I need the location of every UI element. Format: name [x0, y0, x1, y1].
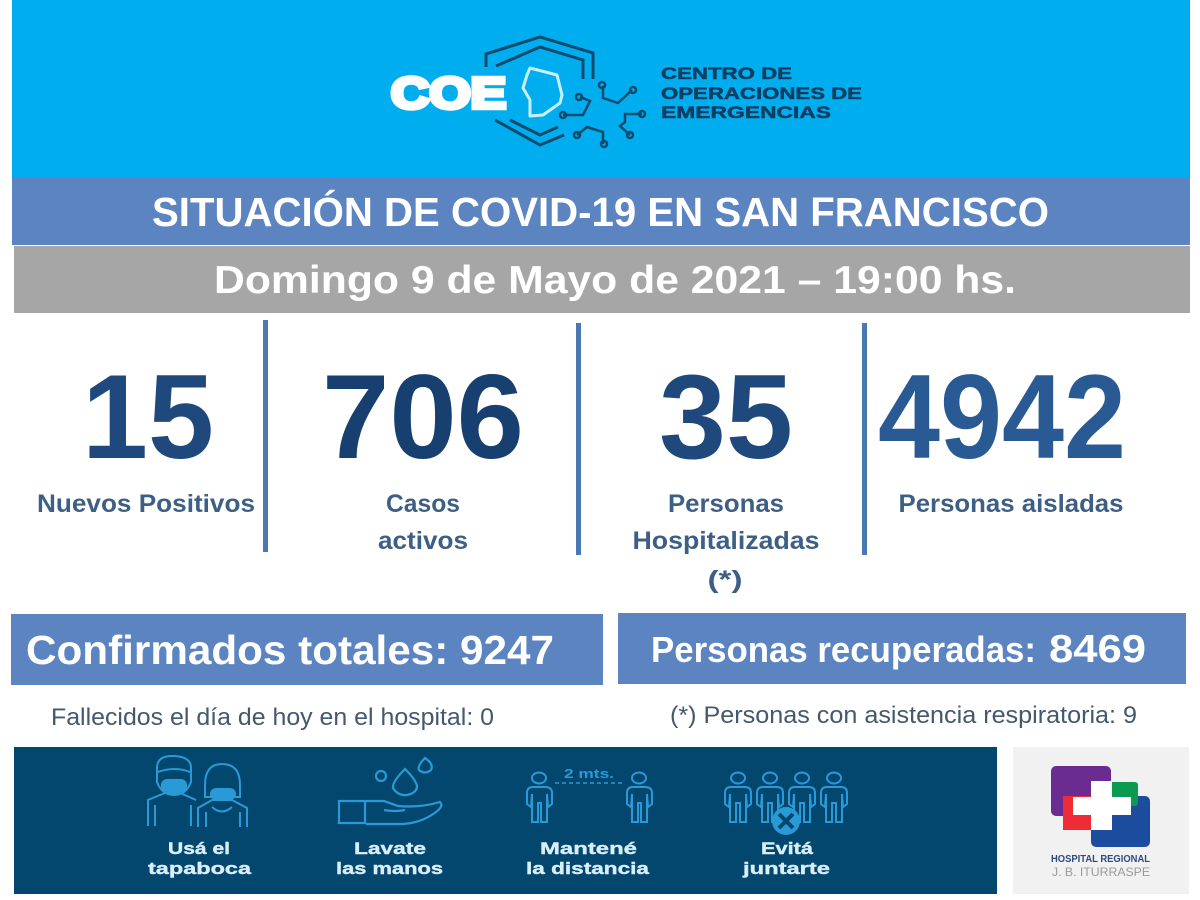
- panel: total confirmed: Confirmados totales: 9247: [26, 627, 554, 673]
- label: keep distance: Mantené: [540, 839, 637, 858]
- header panel: COE logo: [12, 0, 1190, 178]
- icon: network nodes: [560, 82, 645, 147]
- icon: province outline: [523, 68, 562, 116]
- stat: active cases: activos: [378, 527, 468, 555]
- stat: isolated: 4942: [878, 350, 1126, 484]
- label: avoid gatherings: [742, 839, 830, 878]
- logo text: hospital name: HOSPITAL REGIONAL: [1051, 854, 1150, 865]
- hospital logo panel: [1013, 747, 1189, 894]
- logo wordmark: COE: COE: [391, 69, 506, 118]
- title band: [12, 178, 1190, 245]
- label: wash hands: las manos: [336, 859, 443, 878]
- logo text: Centro de Operaciones de Emergencias: OPERACIONES DE: [661, 84, 862, 103]
- stat: isolated: Personas aisladas: [898, 490, 1124, 518]
- stat: new positives: [37, 350, 255, 518]
- title band: SITUACIÓN DE COVID-19 EN SAN FRANCISCO: [152, 189, 1049, 235]
- stat: new positives: 15: [82, 350, 214, 484]
- stat: hospitalized: 35: [659, 350, 793, 484]
- icon: avoid gatherings: [725, 772, 847, 835]
- icon: keep distance: [527, 766, 652, 822]
- label: use mask: Usá el: [168, 839, 230, 858]
- logo text: Centro de Operaciones de Emergencias: EMERGENCIAS: [661, 103, 831, 122]
- stat: active cases: Casos: [386, 490, 460, 518]
- panel: prevention measures: [14, 747, 997, 894]
- panel: recovered: 8469: [1049, 628, 1146, 671]
- logo: overlapping squares and cross: [1051, 766, 1150, 847]
- column separators: [263, 320, 867, 555]
- icon: people wearing masks: [148, 756, 247, 827]
- hospital logo panel: J. B. ITURRASPE: [1052, 865, 1150, 879]
- stat: hospitalized: (*): [708, 566, 742, 594]
- label: avoid gatherings: juntarte: [742, 859, 830, 878]
- icon: washing hands: [339, 758, 441, 824]
- logo text: Centro de Operaciones de Emergencias: [661, 64, 862, 122]
- label: use mask: [148, 839, 252, 878]
- stat: hospitalized: Personas: [668, 490, 784, 518]
- panel: total confirmed: [11, 614, 603, 685]
- logo text: Centro de Operaciones de Emergencias: CENTRO DE: [661, 64, 792, 83]
- panel: recovered: [618, 613, 1186, 684]
- stat: active cases: [322, 350, 524, 555]
- note: respiratory assistance: (*) Personas con asistencia respiratoria: 9: [670, 702, 1137, 729]
- stat: active cases: 706: [322, 350, 524, 484]
- label: keep distance: la distancia: [526, 859, 650, 878]
- date band: Domingo 9 de Mayo de 2021 – 19:00 hs.: [214, 259, 1016, 302]
- label: use mask: tapaboca: [148, 859, 252, 878]
- panel: recovered: Personas recuperadas:: [651, 629, 1036, 670]
- label: avoid gatherings: Evitá: [761, 839, 814, 858]
- note: deaths today: Fallecidos el día de hoy en el hospital: 0: [51, 704, 494, 731]
- label: 2 metres: 2 mts.: [564, 766, 614, 781]
- stat: hospitalized: [632, 350, 820, 594]
- label: wash hands: [336, 839, 443, 878]
- stat: new positives: Nuevos Positivos: [37, 490, 255, 518]
- icon: hexagon shield lines: [486, 37, 593, 145]
- stat: hospitalized: Hospitalizadas: [632, 527, 820, 555]
- label: wash hands: Lavate: [354, 839, 426, 858]
- label: keep distance: [526, 839, 650, 878]
- date band: [14, 246, 1190, 313]
